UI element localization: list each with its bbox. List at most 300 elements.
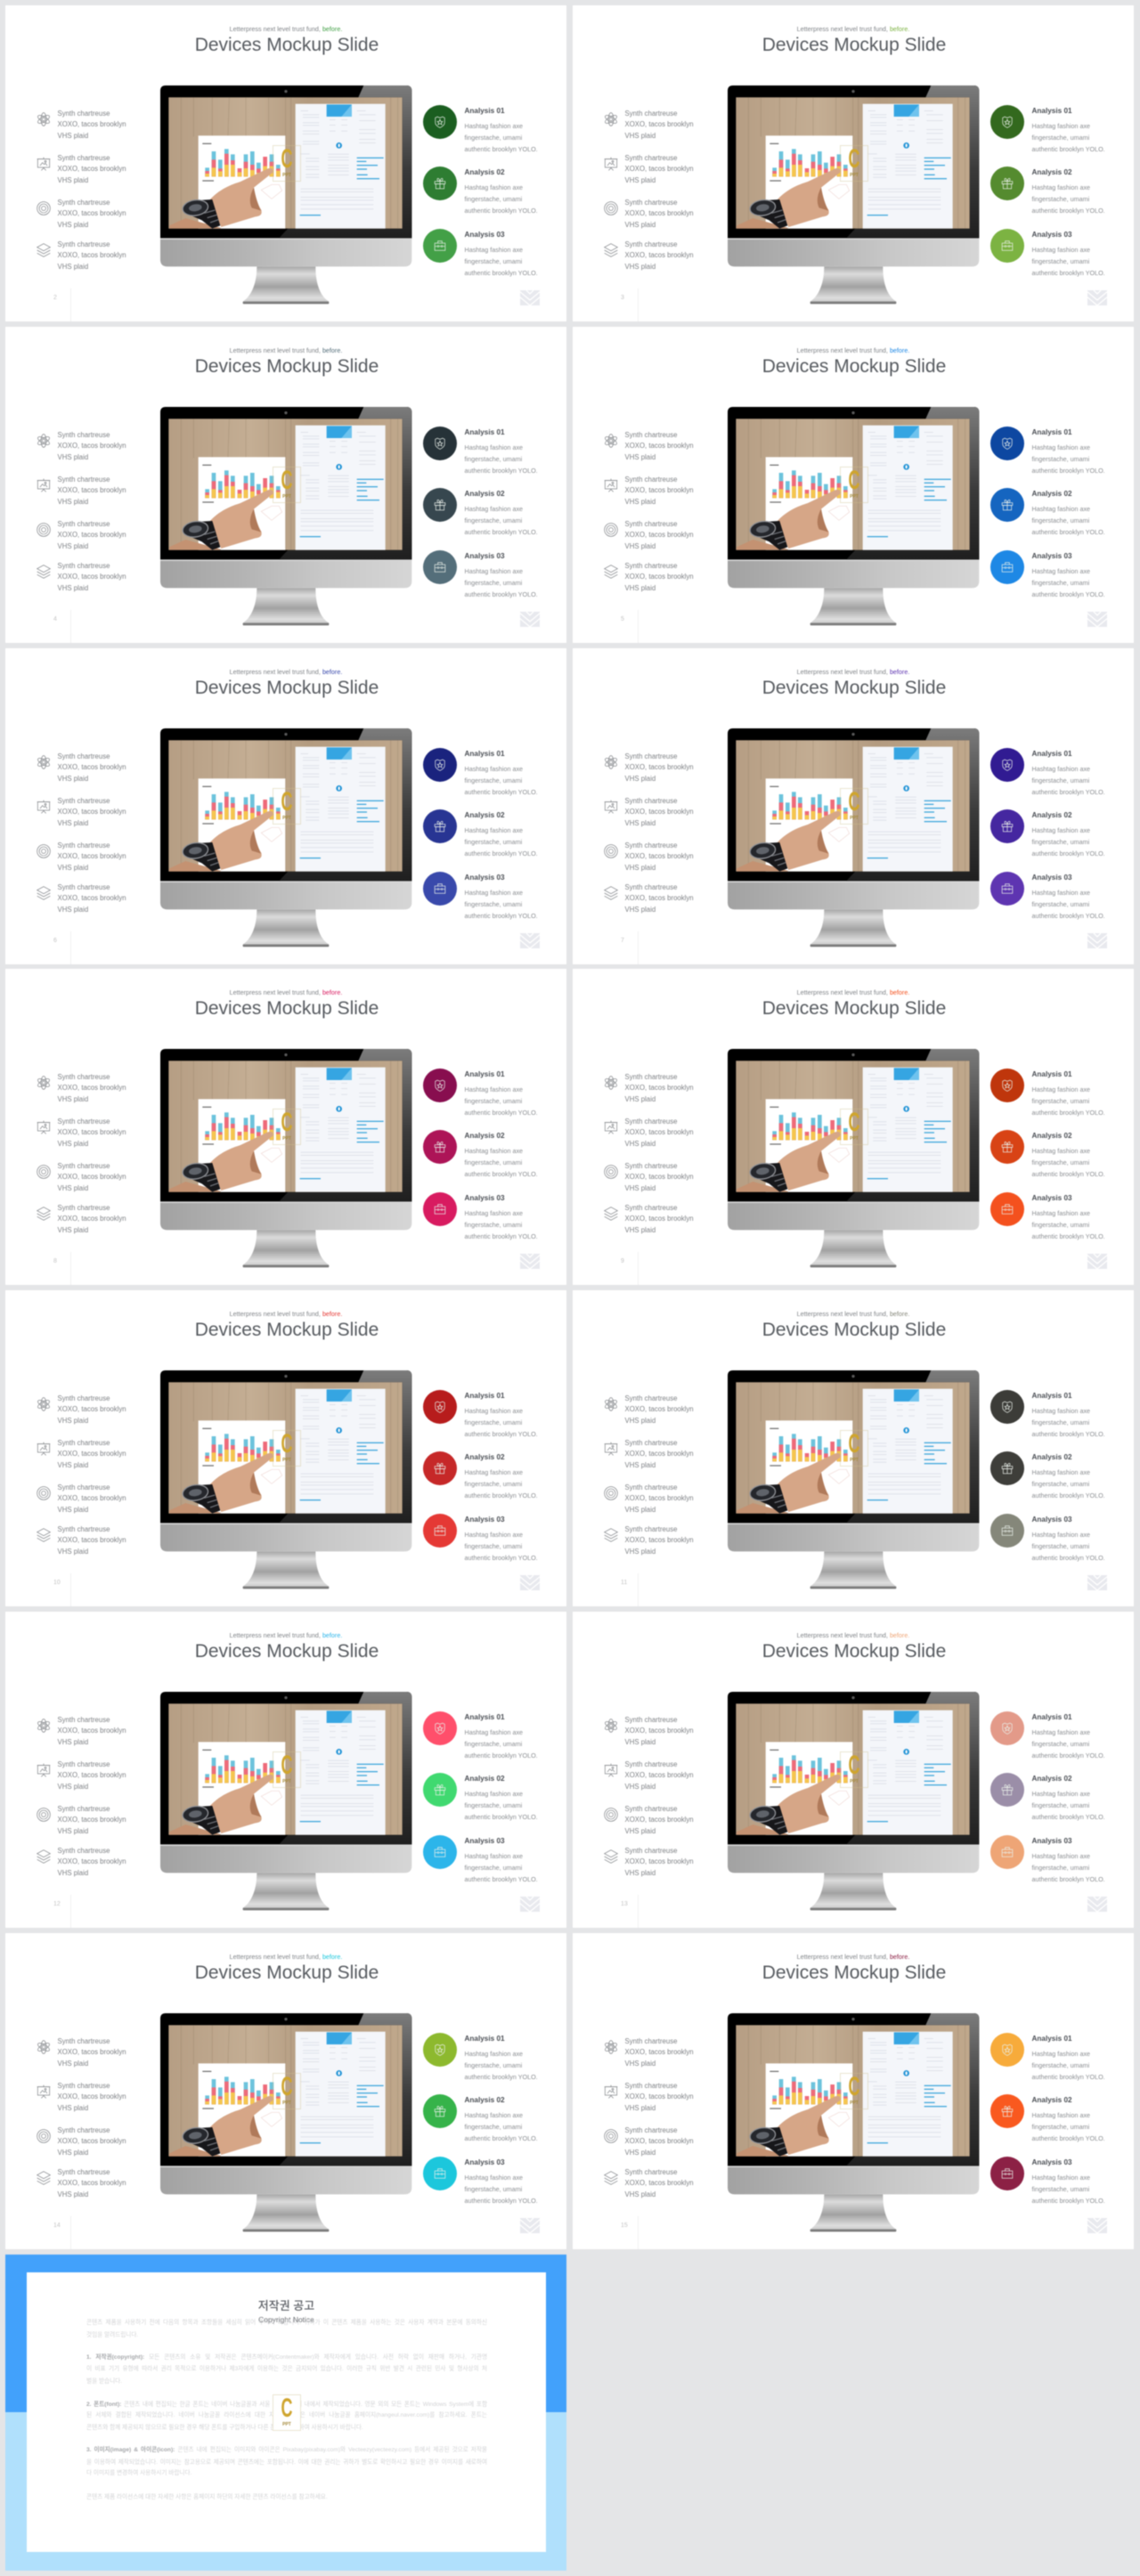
feature: flower: Synth chartreuse	[625, 431, 677, 439]
feature: presentation: Synth chartreuse	[57, 1760, 110, 1768]
analysis 02	[422, 1130, 547, 1183]
analysis 01	[422, 104, 538, 153]
watermark: PPT	[282, 2101, 291, 2106]
feature: layers	[37, 1203, 117, 1236]
feature: target: VHS plaid	[57, 1184, 88, 1192]
page number: 14	[53, 2223, 61, 2229]
feature: flower	[37, 1715, 117, 1748]
page number: 11	[621, 1580, 627, 1586]
feature: target: VHS plaid	[57, 1506, 88, 1514]
analysis 01: Analysis 01	[465, 1070, 505, 1078]
analysis 02: fingerstache, umami	[1031, 1158, 1089, 1166]
monitor mockup	[151, 2008, 419, 2239]
notice card: 벌을 받습니다.	[86, 2378, 122, 2385]
feature: target	[604, 520, 694, 550]
heading: 저작권 공고	[258, 2299, 314, 2312]
analysis 02: Hashtag fashion axe	[465, 2111, 523, 2119]
feature: target: Synth chartreuse	[625, 1162, 677, 1170]
feature: target: VHS plaid	[625, 864, 656, 872]
watermark: PPT	[850, 2101, 859, 2106]
watermark	[273, 145, 301, 182]
analysis 03: authentic brooklyn YOLO.	[465, 269, 538, 277]
analysis 01	[990, 2033, 1115, 2086]
feature: target: VHS plaid	[57, 864, 88, 872]
analysis 03: Hashtag fashion axe	[465, 2174, 523, 2182]
watermark	[273, 2394, 301, 2431]
feature: layers: XOXO, tacos brooklyn	[57, 2179, 126, 2187]
feature: presentation: VHS plaid	[57, 1783, 88, 1791]
watermark	[273, 1430, 301, 1467]
analysis 03	[990, 872, 1115, 925]
title: Devices Mockup Slide	[195, 1640, 379, 1662]
feature: presentation: Synth chartreuse	[57, 154, 110, 162]
subtitle: Letterpress next level trust fund, before.	[797, 1631, 909, 1639]
page number: 12	[53, 1901, 61, 1907]
watermark	[840, 1109, 868, 1145]
analysis 03: fingerstache, umami	[1031, 900, 1089, 908]
analysis 01: fingerstache, umami	[465, 2061, 522, 2069]
feature: flower: XOXO, tacos brooklyn	[57, 120, 126, 128]
analysis 02	[990, 809, 1115, 863]
analysis 02: Hashtag fashion axe	[465, 826, 523, 834]
feature: target: XOXO, tacos brooklyn	[625, 1494, 694, 1502]
feature: flower: VHS plaid	[57, 2060, 88, 2068]
analysis 01: fingerstache, umami	[1031, 455, 1089, 463]
feature: presentation: VHS plaid	[625, 176, 656, 184]
feature: flower	[37, 431, 126, 461]
feature: flower: XOXO, tacos brooklyn	[625, 120, 694, 128]
feature: layers: Synth chartreuse	[625, 2168, 677, 2176]
monitor mockup	[159, 85, 413, 305]
feature: layers	[604, 1524, 684, 1557]
panel: slide 2 green	[5, 5, 566, 321]
analysis 01: authentic brooklyn YOLO.	[465, 1751, 538, 1759]
feature: layers: VHS plaid	[57, 1226, 88, 1234]
analysis 03: Hashtag fashion axe	[1031, 246, 1090, 254]
watermark: PPT	[282, 1136, 291, 1142]
feature: presentation: Synth chartreuse	[625, 1439, 677, 1447]
feature: presentation: Synth chartreuse	[57, 475, 110, 484]
feature: layers: Synth chartreuse	[57, 883, 110, 891]
feature: target: Synth chartreuse	[625, 1483, 677, 1491]
feature: target: Synth chartreuse	[57, 1162, 110, 1170]
analysis 03	[989, 549, 1105, 598]
feature: flower: VHS plaid	[57, 775, 88, 783]
watermark: PPT	[850, 1458, 859, 1463]
analysis 02: authentic brooklyn YOLO.	[465, 1170, 538, 1178]
feature: flower: XOXO, tacos brooklyn	[57, 1727, 126, 1735]
analysis 02: Hashtag fashion axe	[465, 183, 523, 191]
feature: flower: VHS plaid	[57, 132, 88, 140]
analysis 03	[990, 2157, 1115, 2210]
subheading: Copyright Notice	[258, 2315, 314, 2324]
analysis 03	[990, 1192, 1115, 1246]
feature: presentation: XOXO, tacos brooklyn	[57, 1771, 126, 1779]
feature: layers	[604, 1846, 684, 1879]
analysis 03: Hashtag fashion axe	[465, 567, 523, 575]
analysis 01: authentic brooklyn YOLO.	[465, 467, 538, 475]
analysis 02: Analysis 02	[1031, 2096, 1072, 2104]
feature: target: Synth chartreuse	[625, 1805, 677, 1813]
analysis 03: authentic brooklyn YOLO.	[1031, 1232, 1105, 1240]
monitor mockup	[159, 406, 413, 626]
feature: presentation: VHS plaid	[57, 1140, 88, 1148]
title: Devices Mockup Slide	[195, 356, 379, 376]
analysis 01: fingerstache, umami	[465, 1740, 522, 1748]
analysis 02: fingerstache, umami	[1031, 1480, 1089, 1488]
feature: presentation: VHS plaid	[625, 1461, 656, 1469]
panel: slide 4 slate	[5, 327, 566, 643]
analysis 02: authentic brooklyn YOLO.	[1031, 1170, 1105, 1178]
analysis 02: Hashtag fashion axe	[1031, 1790, 1090, 1798]
analysis 03: Hashtag fashion axe	[465, 1852, 523, 1860]
feature: presentation: Synth chartreuse	[57, 1117, 110, 1125]
feature: target: XOXO, tacos brooklyn	[57, 852, 126, 860]
panel: slide 5 blue	[573, 327, 1134, 643]
analysis 01: authentic brooklyn YOLO.	[1031, 788, 1105, 796]
feature: layers: VHS plaid	[57, 2190, 88, 2198]
analysis 03: Hashtag fashion axe	[1031, 2174, 1090, 2182]
logo	[520, 1897, 540, 1912]
analysis 01: Hashtag fashion axe	[1031, 2050, 1090, 2058]
closing line: 콘텐츠 제품 라이선스에 대한 자세한 사항은 홈페이지 하단의 자세한 콘텐츠 라이선스를 참고하세요.	[86, 2494, 328, 2500]
analysis 01: authentic brooklyn YOLO.	[465, 788, 538, 796]
feature: target: XOXO, tacos brooklyn	[625, 1173, 694, 1181]
watermark	[840, 1751, 868, 1788]
logo	[1087, 1254, 1107, 1269]
analysis 03	[422, 228, 538, 277]
feature: presentation: XOXO, tacos brooklyn	[57, 1450, 126, 1458]
feature: flower	[604, 2036, 684, 2069]
analysis 02	[989, 487, 1105, 536]
feature: layers: XOXO, tacos brooklyn	[57, 894, 126, 902]
analysis 03: fingerstache, umami	[1031, 579, 1089, 587]
analysis 03: Hashtag fashion axe	[465, 889, 523, 897]
page number: 6	[53, 938, 57, 944]
analysis 02: fingerstache, umami	[1031, 195, 1089, 203]
logo	[520, 1254, 540, 1269]
feature: layers: VHS plaid	[57, 263, 88, 271]
feature: presentation: XOXO, tacos brooklyn	[625, 1450, 694, 1458]
feature: layers	[604, 882, 684, 915]
watermark: PPT	[850, 1779, 859, 1784]
watermark	[840, 467, 868, 503]
analysis 02: fingerstache, umami	[465, 2123, 522, 2131]
feature: flower	[37, 110, 126, 140]
feature: presentation: Synth chartreuse	[625, 154, 677, 162]
analysis 03: fingerstache, umami	[1031, 1864, 1089, 1872]
feature: flower: Synth chartreuse	[625, 110, 677, 118]
analysis 03: fingerstache, umami	[1031, 1542, 1089, 1550]
analysis 02: fingerstache, umami	[1031, 516, 1089, 524]
analysis 02	[989, 166, 1105, 215]
analysis 02: authentic brooklyn YOLO.	[1031, 849, 1105, 857]
monitor mockup	[719, 1044, 986, 1275]
analysis 02: fingerstache, umami	[465, 1480, 522, 1488]
analysis 02: authentic brooklyn YOLO.	[1031, 1491, 1105, 1499]
feature: target: VHS plaid	[57, 221, 88, 229]
analysis 03: authentic brooklyn YOLO.	[465, 1232, 538, 1240]
analysis 01: authentic brooklyn YOLO.	[1031, 2073, 1105, 2081]
analysis 03	[422, 549, 538, 598]
analysis 03: fingerstache, umami	[465, 2185, 522, 2193]
watermark: PPT	[282, 173, 291, 178]
notice card: 이 비표 기기 유형에 따라서 권리 목적으로 이용하거나 제3자에게 이용하는 것은 금지되어 있습니다. 이러한 규칙 위반 발견 시 관련된 민사 및 형사상의 처	[86, 2366, 487, 2372]
analysis 01	[989, 426, 1105, 475]
panel: slide 6 indigo	[5, 648, 566, 964]
analysis 02: Analysis 02	[465, 1132, 505, 1140]
watermark	[273, 788, 301, 825]
feature: target: Synth chartreuse	[625, 2126, 677, 2134]
feature: presentation	[37, 2081, 117, 2114]
feature: presentation: VHS plaid	[625, 498, 656, 506]
analysis 02: Analysis 02	[465, 811, 505, 819]
analysis 02: Hashtag fashion axe	[465, 1790, 523, 1798]
feature: presentation	[37, 796, 117, 829]
watermark	[273, 467, 301, 503]
page number: 5	[621, 616, 624, 622]
analysis 01: fingerstache, umami	[465, 1097, 522, 1105]
analysis 02	[990, 1773, 1115, 1826]
analysis 03: Analysis 03	[465, 874, 505, 882]
analysis 02	[422, 1451, 547, 1505]
analysis 02: fingerstache, umami	[465, 1158, 522, 1166]
feature: presentation: Synth chartreuse	[57, 2082, 110, 2090]
monitor mockup	[719, 723, 986, 955]
title: Devices Mockup Slide	[762, 1320, 946, 1339]
feature: layers: XOXO, tacos brooklyn	[57, 251, 126, 259]
feature: presentation: XOXO, tacos brooklyn	[57, 486, 126, 494]
page number: 4	[53, 616, 57, 622]
feature: layers: VHS plaid	[625, 2190, 656, 2198]
analysis 02: Hashtag fashion axe	[1031, 183, 1090, 191]
analysis 02	[422, 1773, 547, 1826]
feature: flower: XOXO, tacos brooklyn	[57, 1405, 126, 1413]
watermark: PPT	[850, 1136, 859, 1142]
page number: 8	[53, 1258, 57, 1264]
feature: presentation	[37, 475, 126, 506]
title: Devices Mockup Slide	[762, 1640, 946, 1662]
monitor mockup	[151, 1365, 419, 1597]
logo	[520, 2218, 540, 2233]
watermark	[273, 1109, 301, 1145]
analysis 01: fingerstache, umami	[465, 776, 522, 784]
analysis 01: Hashtag fashion axe	[465, 2050, 523, 2058]
analysis 03: fingerstache, umami	[465, 257, 522, 265]
panel: copyright notice	[5, 2255, 566, 2571]
feature: target: XOXO, tacos brooklyn	[625, 2137, 694, 2145]
feature: flower: Synth chartreuse	[57, 1716, 110, 1724]
feature: layers: VHS plaid	[57, 906, 88, 914]
feature: target	[604, 1804, 684, 1837]
analysis 02	[422, 487, 538, 536]
feature: presentation: XOXO, tacos brooklyn	[57, 1128, 126, 1136]
feature: presentation: Synth chartreuse	[57, 797, 110, 805]
analysis 01: Analysis 01	[1031, 1392, 1072, 1400]
analysis 01: Hashtag fashion axe	[465, 443, 523, 451]
feature: target: VHS plaid	[625, 221, 656, 229]
analysis 03: authentic brooklyn YOLO.	[465, 590, 538, 598]
monitor mockup	[151, 723, 419, 955]
analysis 02: Hashtag fashion axe	[465, 1147, 523, 1155]
analysis 03: Hashtag fashion axe	[1031, 567, 1090, 575]
watermark: PPT	[850, 816, 859, 821]
feature: layers: VHS plaid	[57, 1548, 88, 1556]
analysis 03	[422, 1835, 547, 1889]
feature: layers: XOXO, tacos brooklyn	[625, 1857, 694, 1865]
analysis 01: Analysis 01	[465, 1392, 505, 1400]
analysis 03	[989, 228, 1105, 277]
feature: layers: Synth chartreuse	[57, 562, 110, 570]
feature: flower: XOXO, tacos brooklyn	[625, 763, 694, 771]
feature: target: VHS plaid	[625, 542, 656, 550]
feature: target	[604, 1483, 684, 1516]
analysis 01: Analysis 01	[465, 1713, 505, 1721]
feature: target: Synth chartreuse	[57, 520, 110, 528]
watermark	[840, 1430, 868, 1467]
feature: target: Synth chartreuse	[625, 520, 677, 528]
feature: flower: VHS plaid	[57, 453, 88, 461]
analysis 03: Analysis 03	[465, 1837, 505, 1845]
page number: 15	[621, 2223, 628, 2229]
analysis 03	[422, 1192, 547, 1246]
feature: target: Synth chartreuse	[625, 841, 677, 849]
analysis 03	[422, 2157, 547, 2210]
analysis 02: authentic brooklyn YOLO.	[465, 1491, 538, 1499]
feature: target	[36, 520, 126, 550]
feature: flower	[604, 752, 684, 784]
monitor mockup	[727, 85, 980, 305]
feature: layers: XOXO, tacos brooklyn	[57, 1536, 126, 1544]
feature: flower: Synth chartreuse	[57, 431, 110, 439]
panel: slide 15 warm	[573, 1933, 1134, 2249]
analysis 03: Analysis 03	[1031, 231, 1072, 239]
feature: flower: Synth chartreuse	[57, 110, 110, 118]
panel: slide 7 purple	[573, 648, 1134, 964]
feature: flower: VHS plaid	[625, 775, 656, 783]
analysis 03: Analysis 03	[465, 2158, 505, 2166]
feature: target: XOXO, tacos brooklyn	[57, 2137, 126, 2145]
watermark: PPT	[282, 494, 291, 500]
analysis 01: Analysis 01	[465, 107, 505, 115]
analysis 03: Analysis 03	[465, 1516, 505, 1524]
feature: target: Synth chartreuse	[57, 1805, 110, 1813]
feature: target: Synth chartreuse	[57, 2126, 110, 2134]
feature: layers: VHS plaid	[625, 906, 656, 914]
panel: slide 8 magenta	[5, 969, 566, 1285]
logo	[1087, 612, 1107, 627]
feature: target: VHS plaid	[625, 1506, 656, 1514]
page number: 7	[621, 938, 624, 944]
feature: presentation: XOXO, tacos brooklyn	[57, 2092, 126, 2101]
analysis 01	[422, 748, 547, 801]
analysis 03: Analysis 03	[1031, 1194, 1072, 1202]
feature: target: Synth chartreuse	[57, 199, 110, 207]
analysis 02: Analysis 02	[1031, 1453, 1072, 1461]
feature: presentation: VHS plaid	[57, 819, 88, 827]
feature: layers: Synth chartreuse	[57, 1525, 110, 1533]
analysis 02: authentic brooklyn YOLO.	[1031, 207, 1105, 215]
logo	[1087, 933, 1107, 948]
logo	[520, 933, 540, 948]
watermark	[273, 2073, 301, 2109]
feature: layers: Synth chartreuse	[57, 2168, 110, 2176]
analysis 01: authentic brooklyn YOLO.	[1031, 467, 1105, 475]
analysis 01: fingerstache, umami	[465, 134, 522, 142]
feature: layers: VHS plaid	[57, 1869, 88, 1877]
feature: flower: XOXO, tacos brooklyn	[625, 2048, 694, 2056]
page number: 13	[621, 1901, 628, 1907]
logo	[520, 1575, 540, 1590]
analysis 01: authentic brooklyn YOLO.	[465, 1430, 538, 1438]
panel: slide 11 charcoal	[573, 1290, 1134, 1606]
watermark: PPT	[282, 1458, 291, 1463]
watermark	[840, 788, 868, 825]
feature: presentation: XOXO, tacos brooklyn	[57, 165, 126, 173]
feature: layers: Synth chartreuse	[625, 883, 677, 891]
feature: layers: VHS plaid	[625, 263, 656, 271]
analysis 01: Analysis 01	[1031, 2035, 1072, 2043]
feature: flower: VHS plaid	[57, 1738, 88, 1746]
notice card: 다 이미지를 변경하여 사용하시기 바랍니다.	[86, 2470, 191, 2476]
analysis 02: authentic brooklyn YOLO.	[465, 1813, 538, 1821]
subtitle: Letterpress next level trust fund, before.	[230, 1631, 342, 1639]
subtitle: Letterpress next level trust fund, before.	[797, 346, 909, 354]
feature: flower: VHS plaid	[625, 453, 656, 461]
feature: target: XOXO, tacos brooklyn	[625, 209, 694, 217]
analysis 02: Analysis 02	[465, 1775, 505, 1783]
page number: 9	[621, 1258, 624, 1264]
feature: layers: XOXO, tacos brooklyn	[625, 251, 694, 259]
notice card: 것임을 알려드립니다.	[86, 2332, 138, 2338]
feature: layers: Synth chartreuse	[625, 1847, 677, 1855]
analysis 02: Hashtag fashion axe	[1031, 2111, 1090, 2119]
analysis 01: Hashtag fashion axe	[1031, 1407, 1090, 1415]
analysis 02: fingerstache, umami	[465, 516, 522, 524]
feature: target: VHS plaid	[625, 2149, 656, 2157]
analysis 02: authentic brooklyn YOLO.	[1031, 2134, 1105, 2142]
analysis 02: Hashtag fashion axe	[465, 505, 523, 513]
feature: flower	[604, 1394, 684, 1426]
monitor mockup	[151, 1044, 419, 1275]
title: Devices Mockup Slide	[195, 1962, 379, 1982]
analysis 03: fingerstache, umami	[1031, 2185, 1089, 2193]
notice card: 을 이용하여 제작되었습니다. 이미지는 참고용으로 제공되며 콘텐츠에는 포함됩니다. 이에 대한 권리는 귀하가 별도로 확인하시고 필요한 경우 이미지를 새로하여	[86, 2459, 487, 2466]
feature: presentation: VHS plaid	[625, 819, 656, 827]
feature: flower: Synth chartreuse	[625, 1394, 677, 1402]
analysis 03: fingerstache, umami	[465, 579, 522, 587]
logo	[1087, 1575, 1107, 1590]
subtitle: Letterpress next level trust fund, before.	[797, 1310, 909, 1318]
feature: presentation: VHS plaid	[57, 176, 88, 184]
analysis 01: Analysis 01	[1031, 428, 1072, 436]
analysis 01	[990, 1069, 1115, 1122]
logo	[1087, 290, 1107, 305]
analysis 01: Analysis 01	[465, 428, 505, 436]
feature: layers: XOXO, tacos brooklyn	[625, 1536, 694, 1544]
feature: layers: XOXO, tacos brooklyn	[625, 894, 694, 902]
feature: presentation	[37, 1117, 117, 1150]
feature: presentation	[37, 154, 126, 184]
feature: target: Synth chartreuse	[57, 841, 110, 849]
feature: presentation: Synth chartreuse	[625, 475, 677, 484]
feature: target: XOXO, tacos brooklyn	[57, 209, 126, 217]
feature: flower: XOXO, tacos brooklyn	[57, 1084, 126, 1092]
feature: layers	[604, 2167, 684, 2200]
feature: flower: Synth chartreuse	[625, 752, 677, 760]
subtitle: Letterpress next level trust fund, before.	[797, 988, 909, 996]
analysis 02: Analysis 02	[1031, 1775, 1072, 1783]
